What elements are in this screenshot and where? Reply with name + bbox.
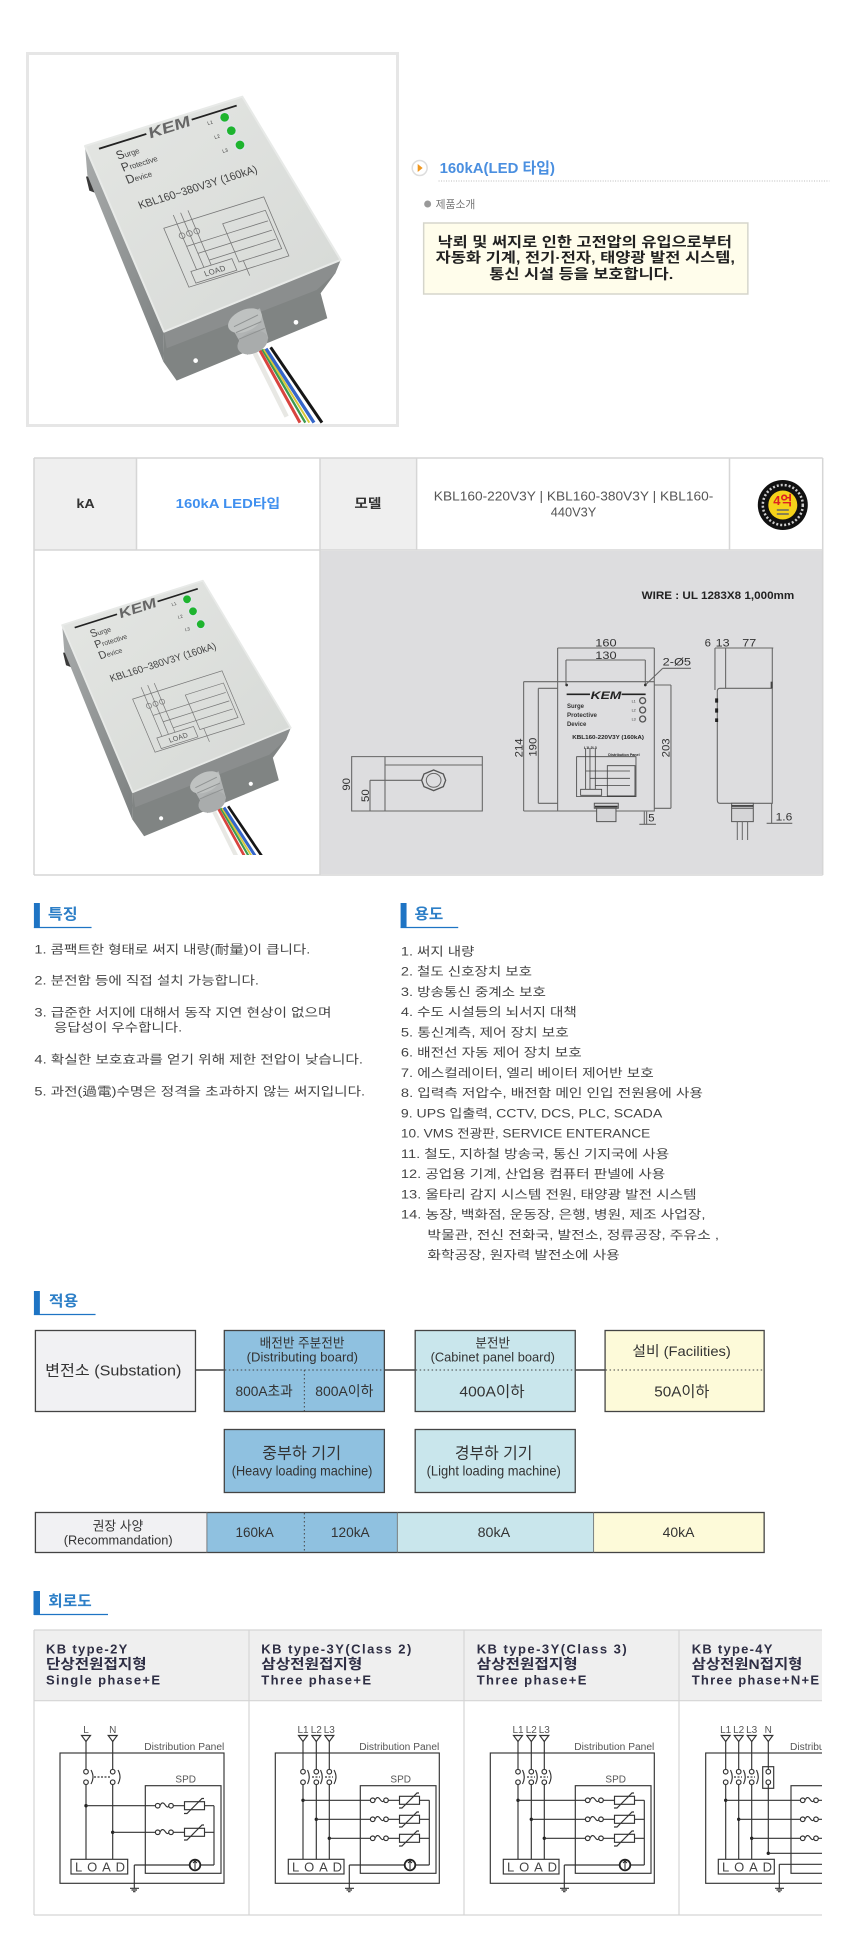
text block: type 3Y class 2 header: 삼상전원접지형 xyxy=(261,1656,362,1672)
heading: application diagram xyxy=(34,1291,96,1315)
text block: features list: 1. 콤팩트한 형태로 써지 내량(耐量)이 큽니다. xyxy=(34,942,310,957)
chart: circuit single phase: N xyxy=(109,1725,116,1736)
chart: circuit three phase class 3: Distribution Panel xyxy=(574,1742,654,1753)
chart: circuit single phase: Distribution Panel xyxy=(144,1742,224,1753)
panel: recommendation bar: (Recommandation) xyxy=(64,1532,173,1548)
heading: product title: 160kA(LED 타입) xyxy=(440,160,555,177)
icon: surge protective device photo: LOAD xyxy=(203,264,227,279)
chart: side view: 6 xyxy=(705,637,711,649)
chart: front view: Surge xyxy=(567,704,585,710)
chart: circuit three phase class 3: L3 xyxy=(539,1725,550,1736)
chart: bottom view xyxy=(341,757,482,811)
panel: recommendation bar: 80kA xyxy=(478,1524,511,1540)
chart: bottom view: 90 xyxy=(341,778,353,791)
text block: type 3Y class 2 header: Three phase+E xyxy=(261,1672,371,1688)
panel: distributing board: (Distributing board) xyxy=(247,1349,358,1365)
text block: applications list: 6. 배전선 자동 제어 장치 보호 xyxy=(401,1046,582,1060)
panel: substation: 변전소 (Substation) xyxy=(45,1362,181,1380)
chart: front view: 160 xyxy=(595,637,617,649)
heading: application diagram: 적용 xyxy=(49,1293,78,1310)
chart: circuit three phase with neutral: LOAD xyxy=(722,1860,772,1874)
panel: recommendation bar: 권장 사양 xyxy=(93,1518,143,1534)
panel: specification table: 모델 xyxy=(354,496,381,511)
chart: front view: 5 xyxy=(648,813,655,825)
text block: product introduction: 제품소개 xyxy=(436,198,475,211)
text block: features list: 5. 과전(過電)수명은 정격을 초과하지 않는 써지입니다. xyxy=(34,1084,365,1099)
panel: heavy loading machine: 중부하 기기 xyxy=(262,1444,341,1463)
text block: type 2Y header: Single phase+E xyxy=(46,1672,160,1688)
heading: applications xyxy=(401,903,458,928)
text block: applications list: 11. 철도, 지하철 방송국, 통신 기지국에 사용 xyxy=(401,1147,669,1161)
chart: circuit three phase class 2: L2 xyxy=(311,1725,322,1736)
text block: product introduction: 통신 시설 등을 보호합니다. xyxy=(489,266,673,282)
text block: type 2Y header: 단상전원접지형 xyxy=(46,1656,147,1672)
chart: circuit three phase class 2: SPD xyxy=(390,1774,411,1786)
text block: type 3Y class 3 header: 삼상전원접지형 xyxy=(477,1656,578,1672)
panel: product photo xyxy=(28,54,398,426)
text block: type 3Y class 3 header xyxy=(477,1642,627,1688)
text block: type 3Y class 2 header: KB type-3Y(Class 2) xyxy=(261,1642,411,1656)
text block: product introduction: 자동화 기계, 전기·전자, 태양광 발전 시스템, xyxy=(436,249,735,266)
text block: type 4Y header: Three phase+N+E xyxy=(692,1672,819,1688)
chart: circuit three phase with neutral xyxy=(705,1726,822,1892)
panel: light loading machine: 경부하 기기 xyxy=(455,1444,532,1463)
chart: front view: 2-Ø5 xyxy=(663,657,691,669)
panel: recommendation bar xyxy=(35,1512,765,1553)
chart: circuit three phase class 2 xyxy=(275,1725,439,1892)
panel: distributing board xyxy=(224,1330,384,1412)
panel: specification table xyxy=(34,458,823,875)
panel: recommendation bar: 120kA xyxy=(331,1524,370,1540)
chart: circuit three phase class 2: LOAD xyxy=(292,1860,342,1874)
panel: dimension drawings: WIRE : UL 1283X8 1,000mm xyxy=(642,590,794,602)
panel: distributing board: 배전반 주분전반 xyxy=(260,1335,345,1351)
panel: second product photo: L2 xyxy=(177,613,184,620)
panel: second product photo: L1 xyxy=(171,601,178,607)
icon: surge protective device photo xyxy=(85,97,341,423)
text block: applications list: 10. VMS 전광판, SERVICE ENTERANCE xyxy=(401,1127,650,1141)
panel: dimension drawings xyxy=(341,590,794,840)
panel: distributing board: 800A초과 xyxy=(236,1383,293,1399)
heading: applications: 용도 xyxy=(414,906,444,923)
chart: bottom view: 50 xyxy=(360,789,372,802)
panel: heavy loading machine: (Heavy loading machine) xyxy=(232,1462,372,1479)
panel: facilities xyxy=(605,1330,764,1412)
chart: circuit single phase: SPD xyxy=(175,1774,196,1786)
text block: features list: 3. 급준한 서지에 대해서 동작 지연 현상이 없으며 xyxy=(34,1005,332,1020)
text block: applications list: 화학공장, 원자력 발전소에 사용 xyxy=(427,1248,620,1262)
panel: recommendation bar: 160kA xyxy=(236,1524,274,1540)
chart: front view: 203 xyxy=(660,738,672,757)
chart: circuit three phase class 2: L1 xyxy=(297,1725,309,1736)
text block: applications list: 1. 써지 내량 xyxy=(401,944,474,959)
panel: specification table: 160kA LED타입 xyxy=(176,496,280,511)
chart: circuit three phase with neutral: N xyxy=(765,1725,772,1736)
text block: type 3Y class 3 header: Three phase+E xyxy=(477,1672,587,1688)
panel: second product photo: KBL160~380V3Y (160kA) xyxy=(108,641,218,685)
panel: second product photo: Device xyxy=(97,644,124,662)
chart: circuit three phase with neutral: L1 xyxy=(720,1725,732,1736)
chart: front view: L2 xyxy=(632,709,636,713)
heading: features: 특징 xyxy=(48,906,78,923)
text block: type 2Y header: KB type-2Y xyxy=(46,1642,128,1656)
text block: product introduction xyxy=(424,198,748,294)
panel: substation xyxy=(35,1330,195,1412)
chart: side view: 1.6 xyxy=(776,812,792,824)
chart: front view xyxy=(513,637,691,825)
text block: applications list: 5. 통신계측, 제어 장치 보호 xyxy=(401,1025,569,1040)
chart: front view: Device xyxy=(567,722,587,728)
icon: surge protective device photo: Protective xyxy=(119,150,160,175)
chart: side view: 13 xyxy=(716,637,730,649)
panel: cabinet panel board: 400A이하 xyxy=(459,1383,525,1401)
heading: product title xyxy=(412,160,829,181)
text block: type 4Y header: KB type-4Y xyxy=(692,1642,773,1656)
panel: specification table: KBL160-220V3Y | KBL160-380V3Y | KBL160- xyxy=(434,488,713,504)
chart: circuit single phase: L xyxy=(83,1725,89,1736)
text block: applications list: 박물관, 전신 전화국, 발전소, 정류공장, 주유소 , xyxy=(427,1228,719,1242)
panel: second product photo: KEM xyxy=(116,595,160,621)
icon: surge protective device photo: L1 xyxy=(207,120,214,127)
icon: surge protective device photo: L2 xyxy=(214,134,221,141)
chart: circuit three phase class 3: L2 xyxy=(526,1725,537,1736)
panel: cabinet panel board: 분전반 xyxy=(475,1335,510,1351)
icon: surge protective device photo: Device xyxy=(123,166,154,187)
icon: warranty badge xyxy=(758,480,808,530)
text block: applications list xyxy=(401,944,719,1262)
panel: distributing board: 800A이하 xyxy=(315,1383,374,1399)
text block: type 3Y class 3 header: KB type-3Y(Class 3) xyxy=(477,1642,627,1656)
chart: front view: KEM xyxy=(591,690,622,702)
text block: product introduction: 낙뢰 및 써지로 인한 고전압의 유입으로부터 xyxy=(438,234,732,250)
panel: light loading machine xyxy=(415,1430,575,1492)
panel: heavy loading machine xyxy=(224,1430,384,1492)
panel: recommendation bar: 40kA xyxy=(663,1524,695,1540)
chart: front view: KBL160-220V3Y (160kA) xyxy=(572,735,644,741)
text block: applications list: 13. 울타리 감지 시스템 전원, 태양광 발전 시스템 xyxy=(401,1187,697,1202)
panel: second product photo: LOAD xyxy=(168,732,189,745)
panel: cabinet panel board xyxy=(415,1330,575,1412)
text block: applications list: 7. 에스컬레이터, 엘리 베이터 제어반 보호 xyxy=(401,1066,654,1080)
text block: features list: 2. 분전함 등에 직접 설치 가능합니다. xyxy=(34,973,259,988)
text block: applications list: 3. 방송통신 중계소 보호 xyxy=(401,985,546,999)
icon: surge protective device photo: Surge xyxy=(114,143,141,163)
heading: circuit diagrams xyxy=(34,1591,108,1615)
chart: front view: L1L2L3 xyxy=(584,746,597,750)
chart: circuit three phase with neutral: L3 xyxy=(746,1725,758,1736)
text block: type 3Y class 2 header xyxy=(261,1642,411,1688)
chart: side view xyxy=(705,637,792,840)
panel: second product photo: L3 xyxy=(184,626,191,632)
text block: features list: 응답성이 우수합니다. xyxy=(54,1020,182,1035)
panel: light loading machine: (Light loading machine) xyxy=(427,1462,561,1479)
chart: circuit single phase: LOAD xyxy=(75,1860,125,1874)
icon: surge protective device photo: KEM xyxy=(145,113,194,142)
text block: applications list: 12. 공업용 기계, 산업용 컴퓨터 판넬에 사용 xyxy=(401,1167,665,1181)
chart: circuit three phase class 3: LOAD xyxy=(507,1860,557,1874)
panel: cabinet panel board: (Cabinet panel board) xyxy=(431,1349,555,1365)
chart: application diagram xyxy=(35,1330,765,1553)
panel: facilities: 설비 (Facilities) xyxy=(632,1343,731,1359)
icon: surge protective device photo: L3 xyxy=(222,148,229,155)
panel: circuit table xyxy=(34,1630,860,1915)
panel: specification table: 440V3Y xyxy=(551,504,597,520)
chart: circuit three phase class 3: SPD xyxy=(605,1774,626,1786)
text block: applications list: 9. UPS 입출력, CCTV, DCS, PLC, SCADA xyxy=(401,1106,662,1121)
panel: second product photo xyxy=(62,581,291,874)
panel: specification table: kA xyxy=(76,496,95,511)
chart: front view: Distribution Panel xyxy=(608,753,640,757)
chart: front view: 190 xyxy=(528,738,540,757)
text block: applications list: 2. 철도 신호장치 보호 xyxy=(401,965,532,979)
chart: circuit single phase xyxy=(60,1725,224,1892)
heading: features xyxy=(34,903,92,928)
text block: applications list: 8. 입력측 저압수, 배전함 메인 인입 전원용에 사용 xyxy=(401,1086,703,1100)
panel: second product photo: Surge xyxy=(88,623,113,640)
chart: circuit three phase class 3: L1 xyxy=(512,1725,524,1736)
text block: applications list: 14. 농장, 백화점, 운동장, 은행, 병원, 제조 사업장, xyxy=(401,1207,705,1222)
chart: side view: 77 xyxy=(742,637,756,649)
chart: circuit three phase class 2: L3 xyxy=(324,1725,335,1736)
chart: circuit three phase class 2: Distribution Panel xyxy=(359,1742,439,1753)
panel: second product photo: Protective xyxy=(93,630,129,651)
chart: circuit three phase class 3 xyxy=(490,1725,654,1892)
text block: features list: 4. 확실한 보호효과를 얻기 위해 제한 전압이 낮습니다. xyxy=(34,1052,363,1067)
chart: front view: L1 xyxy=(632,699,636,703)
chart: front view: Protective xyxy=(567,713,598,719)
text block: type 4Y header: 삼상전원N접지형 xyxy=(692,1656,802,1672)
chart: front view: 130 xyxy=(595,650,617,662)
text block: applications list: 4. 수도 시설등의 뇌서지 대책 xyxy=(401,1004,577,1019)
heading: circuit diagrams: 회로도 xyxy=(48,1593,92,1610)
text block: features list xyxy=(34,942,365,1099)
chart: front view: L3 xyxy=(632,718,636,722)
text block: type 4Y header xyxy=(692,1642,819,1688)
icon: surge protective device photo: KBL160~380V3Y (160kA) xyxy=(137,164,259,212)
text block: type 2Y header xyxy=(46,1642,160,1688)
chart: circuit three phase with neutral: L2 xyxy=(733,1725,745,1736)
chart: front view: 214 xyxy=(513,738,525,757)
panel: facilities: 50A이하 xyxy=(654,1383,710,1401)
icon: warranty badge: 4억 xyxy=(773,493,792,508)
